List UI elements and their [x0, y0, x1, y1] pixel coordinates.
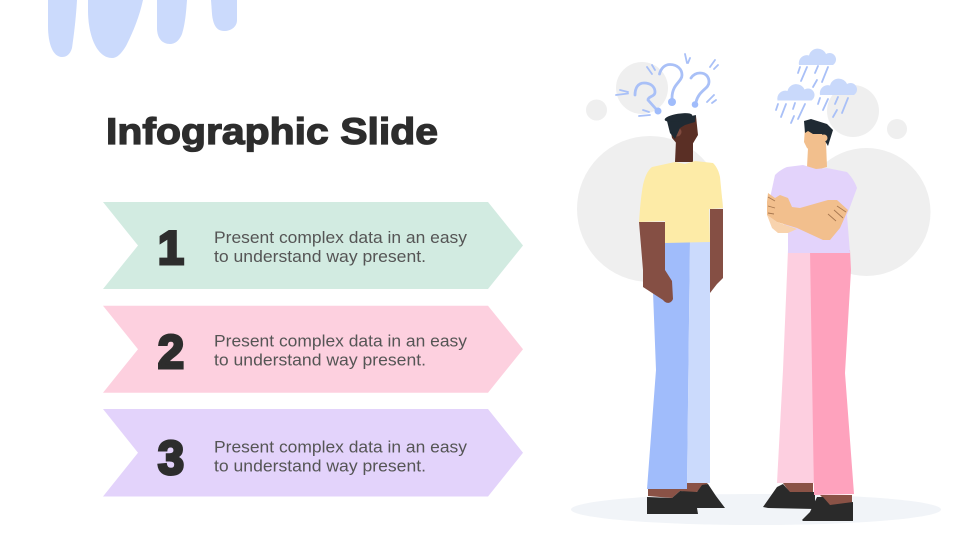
person right, worried — [763, 119, 857, 521]
item 1 chevron: Present complex data in an easy — [214, 229, 468, 247]
item 1 chevron: 1 — [158, 221, 184, 274]
left person neck — [675, 140, 693, 162]
decorative blue drips — [48, 0, 237, 58]
person left, confused — [639, 112, 725, 514]
illustration background circles — [577, 62, 930, 282]
rain clouds — [776, 49, 857, 123]
item 1 chevron: to understand way present. — [214, 248, 426, 266]
right person face — [804, 128, 826, 152]
item 2 chevron — [103, 306, 523, 393]
right person shoes — [763, 483, 853, 521]
left person shirt — [639, 161, 723, 243]
left person ear — [672, 128, 682, 136]
item 1 chevron — [103, 202, 523, 289]
item 2 chevron: to understand way present. — [214, 352, 426, 370]
left person face — [669, 116, 698, 145]
right person trousers — [777, 250, 854, 495]
question marks — [616, 54, 718, 116]
item 2 chevron: Present complex data in an easy — [214, 332, 468, 350]
ground shadow — [571, 494, 941, 525]
item 3 chevron: 3 — [158, 431, 184, 484]
item 2 chevron: 2 — [158, 325, 184, 378]
left person trousers — [647, 240, 710, 489]
right person shirt — [770, 165, 857, 253]
right person ear — [820, 134, 828, 142]
right person crossed arms — [767, 193, 848, 240]
title: Infographic Slide — [106, 110, 438, 152]
item 3 chevron — [103, 409, 523, 496]
right person neck — [807, 142, 827, 170]
left person arms — [639, 209, 723, 303]
item 3 chevron: Present complex data in an easy — [214, 438, 468, 456]
left person shoes — [647, 483, 725, 514]
item 3 chevron: to understand way present. — [214, 458, 426, 476]
left person hair — [667, 115, 696, 139]
left person flat hair top — [664, 112, 693, 123]
right person hair — [804, 119, 833, 146]
